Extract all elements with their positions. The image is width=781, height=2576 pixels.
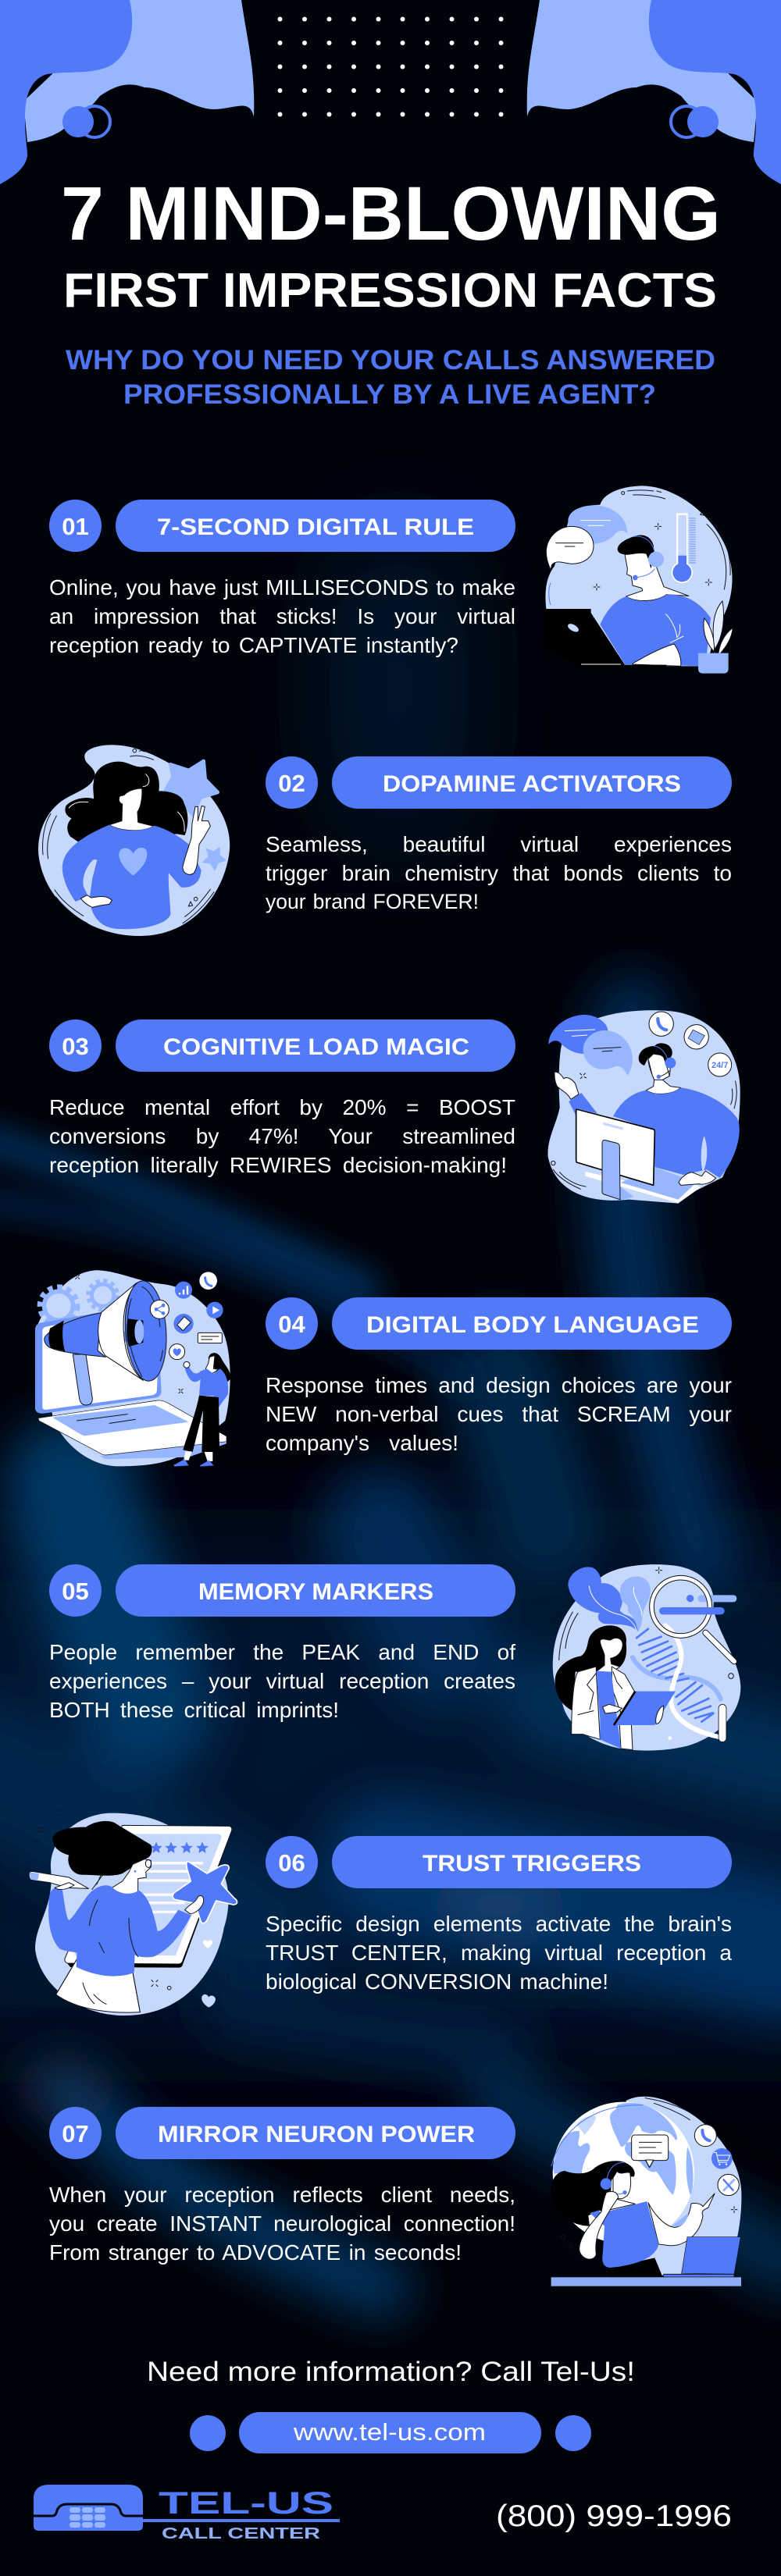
logo: Tel-Us Call Center: TEL-US [159, 2486, 333, 2521]
panel: fact 05 [49, 1564, 740, 1751]
body text [49, 573, 518, 662]
panel: fact 01 [49, 486, 733, 674]
body text: NEW non-verbal cues that SCREAM your [266, 1402, 732, 1426]
heading pill [332, 1297, 732, 1350]
panel: fact 07 [49, 2097, 741, 2286]
number badge 02 [266, 756, 318, 809]
heading pill [116, 2107, 515, 2159]
body text: trigger brain chemistry that bonds clients to [266, 861, 732, 885]
number badge 05: 05 [62, 1578, 89, 1605]
body text: Seamless, beautiful virtual experiences [266, 832, 732, 856]
body text: Specific design elements activate the brain's [266, 1912, 732, 1936]
number badge 06: 06 [278, 1849, 305, 1877]
body text: your brand FOREVER! [266, 890, 479, 913]
subtitle: PROFESSIONALLY BY A LIVE AGENT? [123, 379, 656, 410]
header decoration [0, 0, 781, 184]
body text: Response times and design choices are your [266, 1373, 732, 1397]
phone number: (800) 999-1996 [496, 2500, 732, 2533]
heading pill: MIRROR NEURON POWER [158, 2122, 475, 2147]
heading pill [116, 1019, 515, 1072]
heading pill [332, 1836, 732, 1888]
body text: biological CONVERSION machine! [266, 1969, 608, 1994]
call to action: Need more information? Call Tel-Us! [147, 2357, 635, 2387]
left corner blobs [0, 0, 254, 184]
title: FIRST IMPRESSION FACTS [63, 264, 717, 318]
subtitle [66, 345, 715, 410]
number badge 01 [49, 500, 102, 552]
illustration: woman with peace sign [38, 745, 230, 936]
illustration: agent at monitor: 24/7 [711, 1061, 728, 1070]
body text: reception ready to CAPTIVATE instantly? [49, 633, 458, 657]
heading pill: DOPAMINE ACTIVATORS [383, 771, 681, 797]
number badge 01: 01 [62, 513, 89, 540]
body text: company's values! [266, 1431, 458, 1455]
heading pill [116, 500, 515, 552]
body text: TRUST CENTER, making virtual reception a [266, 1941, 732, 1965]
body text: Online, you have just MILLISECONDS to make [49, 575, 515, 600]
number badge 07 [49, 2107, 102, 2159]
body text: conversions by 47%! Your streamlined [49, 1124, 515, 1148]
body text: reception literally REWIRES decision-making! [49, 1153, 507, 1177]
panel: fact 04 [35, 1270, 734, 1467]
illustration: woman holding star and review screen [29, 1809, 237, 2019]
title [61, 171, 721, 318]
number badge 06 [266, 1836, 318, 1888]
subtitle: WHY DO YOU NEED YOUR CALLS ANSWERED [66, 345, 715, 375]
number badge 07: 07 [62, 2120, 89, 2147]
number badge 04 [266, 1297, 318, 1350]
heading pill: DIGITAL BODY LANGUAGE [366, 1312, 699, 1338]
logo: Tel-Us Call Center [34, 2485, 340, 2542]
logo: Tel-Us Call Center: CALL CENTER [162, 2525, 321, 2542]
body text: BOTH these critical imprints! [49, 1698, 339, 1722]
body text: Reduce mental effort by 20% = BOOST [49, 1095, 515, 1119]
number badge 03: 03 [62, 1033, 89, 1060]
heading pill: 7-SECOND DIGITAL RULE [157, 514, 474, 540]
illustration: agent with globe and laptop [551, 2097, 741, 2286]
body text [266, 1909, 734, 1998]
body text: experiences – your virtual reception creates [49, 1669, 515, 1693]
icon: telephone [34, 2485, 143, 2531]
illustration: megaphone on laptop [35, 1270, 230, 1467]
body text [49, 2180, 518, 2269]
panel: fact 06 [29, 1809, 734, 2019]
number badge 03 [49, 1019, 102, 1072]
body text [49, 1638, 518, 1727]
website pill with dots [190, 2412, 591, 2453]
heading pill [116, 1564, 515, 1617]
title: 7 MIND-BLOWING [61, 171, 721, 256]
illustration: agent at monitor [548, 1010, 740, 1204]
heading pill: TRUST TRIGGERS [423, 1851, 641, 1877]
body text: People remember the PEAK and END of [49, 1640, 515, 1664]
number badge 05 [49, 1564, 102, 1617]
body text: an impression that sticks! Is your virtual [49, 604, 515, 628]
body text: From stranger to ADVOCATE in seconds! [49, 2240, 462, 2265]
dot grid [278, 17, 503, 117]
right corner blobs [527, 0, 781, 184]
body text [266, 830, 734, 919]
body text [266, 1371, 734, 1460]
illustration: agent with headset and thermometer [544, 486, 733, 674]
panel: fact 03 [49, 1010, 740, 1204]
heading pill: COGNITIVE LOAD MAGIC [163, 1034, 469, 1060]
number badge 04: 04 [278, 1311, 305, 1338]
illustration: scientist with DNA and magnifier [553, 1564, 740, 1751]
body text: When your reception reflects client needs, [49, 2183, 515, 2207]
heading pill [332, 756, 732, 809]
body text: you create INSTANT neurological connection! [49, 2211, 515, 2236]
body text [49, 1093, 518, 1182]
number badge 02: 02 [278, 770, 305, 797]
panel: fact 02 [38, 745, 734, 936]
heading pill: MEMORY MARKERS [198, 1579, 433, 1605]
website pill with dots: www.tel-us.com [293, 2418, 486, 2446]
